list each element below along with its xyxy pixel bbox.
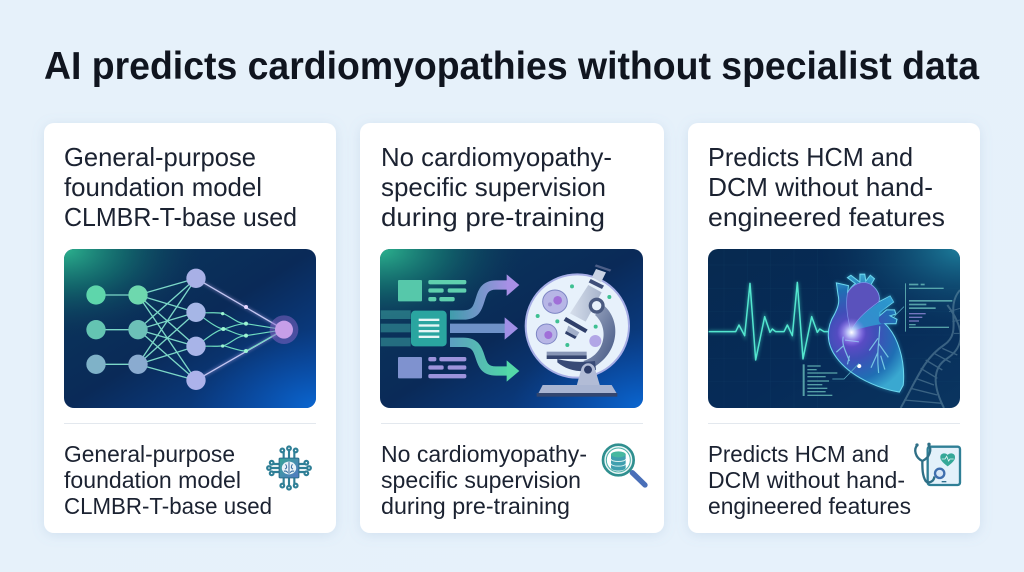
heading: predicts HCM and DCM: engineered features [708, 202, 945, 232]
heading: foundation model: CLMBR-T-base used [64, 202, 297, 232]
body text: predicts HCM and DCM: engineered features [708, 493, 911, 519]
data blocks [381, 280, 466, 378]
heading: predicts HCM and DCM: Predicts HCM and [708, 142, 913, 172]
arrows [450, 285, 509, 371]
DNA helix [901, 290, 961, 408]
ECG line [708, 281, 828, 362]
panel: predicts HCM and DCM [688, 123, 980, 533]
heading: predicts HCM and DCM [708, 142, 945, 232]
heading: predicts HCM and DCM: DCM without hand- [708, 172, 933, 202]
heading: no specific supervision: No cardiomyopathy- [381, 142, 612, 172]
heading: foundation model [64, 142, 297, 232]
body text: predicts HCM and DCM: Predicts HCM and [708, 441, 889, 467]
title: AI predicts cardiomyopathies without specialist data [44, 45, 979, 88]
illustration: neural network [64, 249, 316, 408]
heading: foundation model: General-purpose [64, 142, 256, 172]
illustration: data flow to microscope [380, 249, 643, 408]
icon: stethoscope and tablet [914, 442, 962, 486]
icon: database magnifier [602, 443, 648, 488]
body text: foundation model: General-purpose [64, 441, 235, 467]
body text: predicts HCM and DCM: DCM without hand- [708, 467, 905, 493]
illustration: ECG, heart and DNA [708, 249, 960, 408]
heading: foundation model: foundation model [64, 172, 262, 202]
microscope globe [526, 264, 629, 397]
icon: AI chip brain [266, 445, 312, 491]
panel: foundation model [44, 123, 336, 533]
heading: no specific supervision: during pre-training [381, 202, 605, 232]
body text: no specific supervision: specific supervision [381, 467, 581, 493]
body text: no specific supervision: during pre-training [381, 493, 570, 519]
heart [828, 274, 904, 392]
body text: foundation model [64, 441, 272, 519]
body text: no specific supervision [381, 441, 587, 519]
body text: predicts HCM and DCM [708, 441, 911, 519]
body text: foundation model: foundation model [64, 467, 241, 493]
heading: no specific supervision [381, 142, 612, 232]
dividers [64, 422, 960, 424]
data readouts [803, 283, 952, 396]
panel: no specific supervision [360, 123, 664, 533]
body text: foundation model: CLMBR-T-base used [64, 493, 272, 519]
heading: no specific supervision: specific supervision [381, 172, 606, 202]
body text: no specific supervision: No cardiomyopathy- [381, 441, 587, 467]
